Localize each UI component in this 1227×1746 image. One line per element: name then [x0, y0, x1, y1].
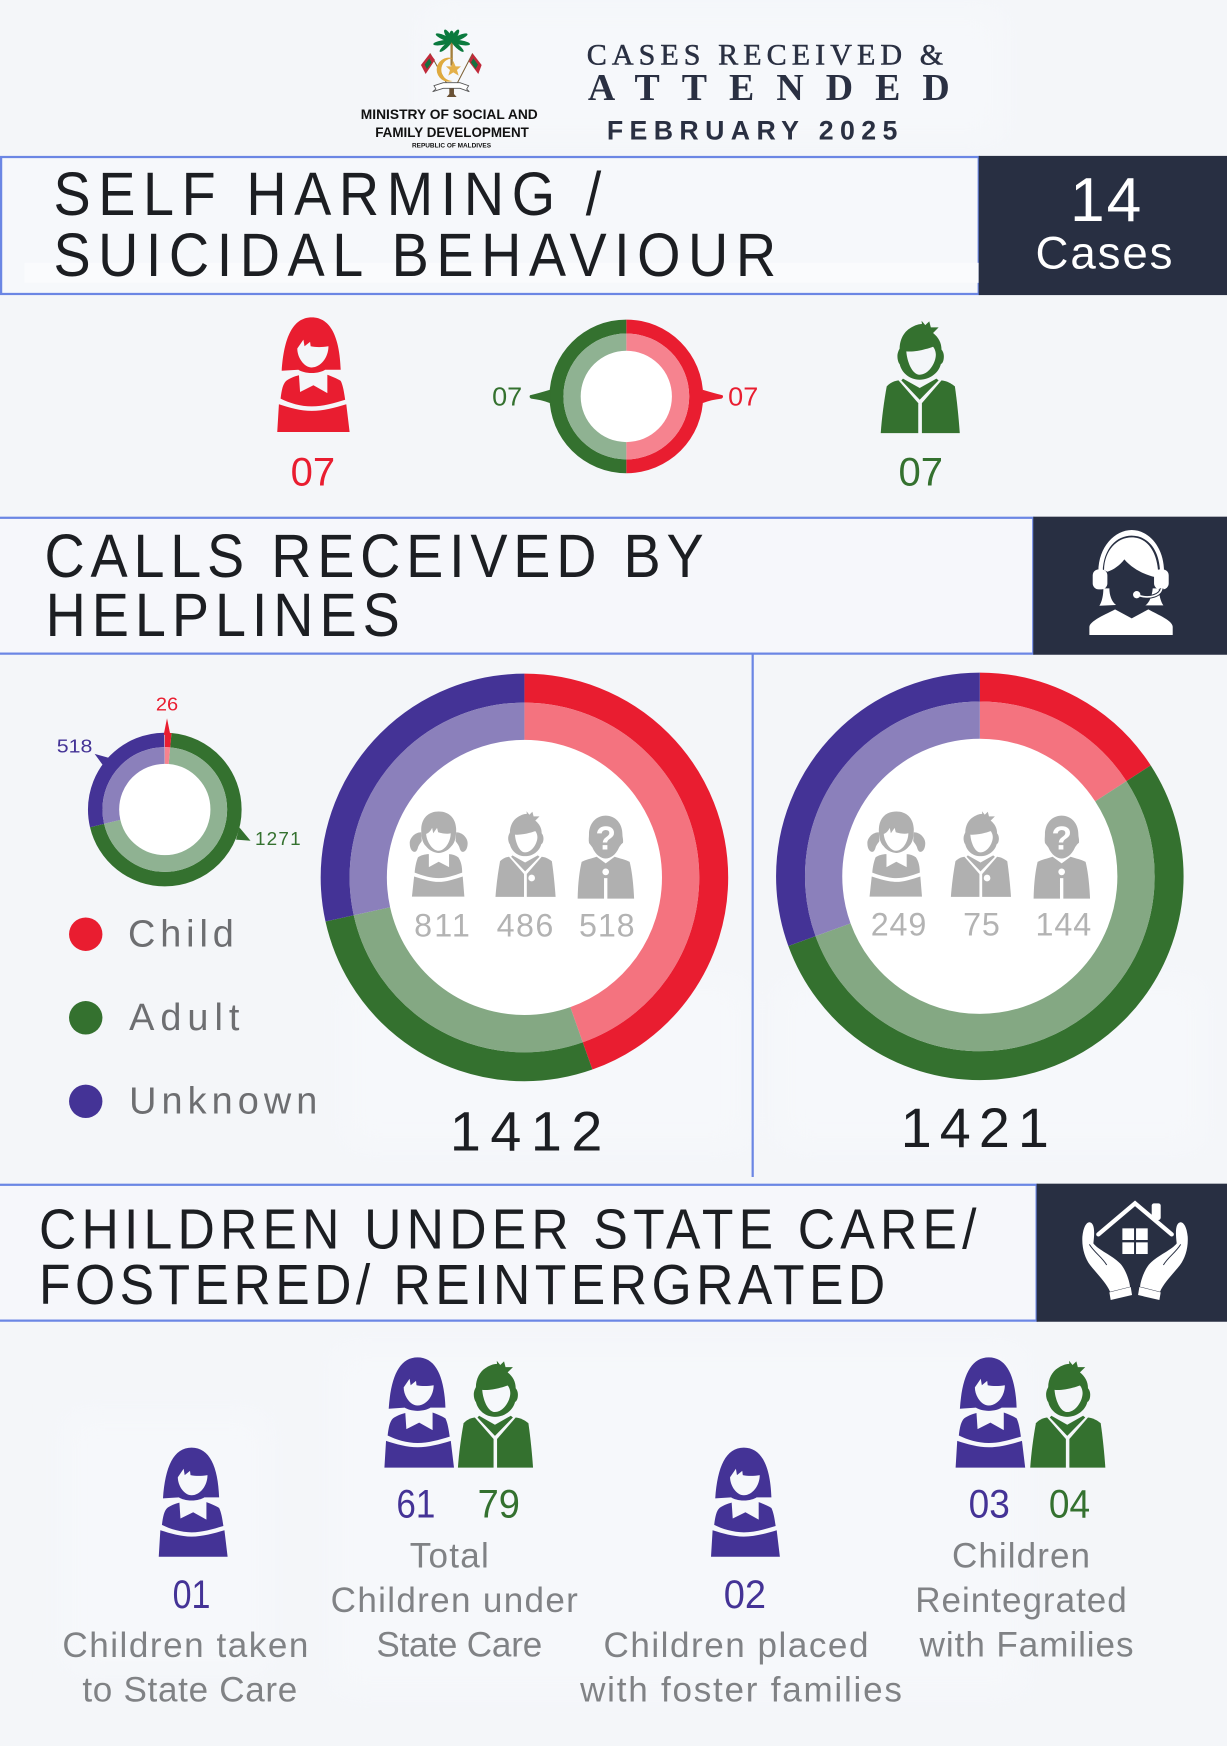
counts: 04 [1049, 1483, 1090, 1527]
icon: girl [159, 1448, 228, 1557]
icon: boy [1030, 1361, 1105, 1468]
legend item: adult: Adult [129, 997, 240, 1039]
heading [45, 522, 704, 649]
title: CASES RECEIVED & [587, 38, 943, 72]
icon: unknown person: ? [1051, 821, 1072, 858]
icon: house in hands [1082, 1203, 1188, 1300]
panel: children taken to state care [62, 1448, 308, 1709]
label: Total [410, 1536, 489, 1575]
heading: CHILDREN UNDER STATE CARE/ [39, 1197, 977, 1261]
male count: 07 [899, 450, 943, 494]
label [915, 1536, 1133, 1664]
counts: 03 [969, 1483, 1010, 1527]
count: 01 [173, 1573, 210, 1617]
case count [1035, 166, 1172, 278]
heading: SELF HARMING / [53, 161, 602, 229]
donut chart: gender [492, 320, 758, 473]
case count: Cases [1035, 227, 1172, 278]
icon: unknown person: ? [596, 821, 616, 858]
donut chart: gender: 07 [492, 383, 522, 411]
label [579, 1626, 902, 1709]
icon: unknown person [578, 816, 634, 899]
label: Reintegrated [915, 1581, 1127, 1620]
label: with Families [919, 1625, 1133, 1664]
chart: small overall donut: 518 [57, 737, 92, 758]
vertical divider [752, 654, 754, 1177]
count: 02 [724, 1573, 766, 1617]
female count: 07 [291, 450, 335, 494]
chart: right large donut 1421 [791, 687, 1169, 1159]
icon: ministry emblem [421, 28, 482, 97]
heading: HELPLINES [46, 581, 400, 649]
legend item: child: Child [128, 913, 234, 955]
heading [53, 161, 776, 290]
label: State Care [376, 1625, 542, 1664]
chart: left large donut 1412 [335, 688, 714, 1162]
counts: 79 [478, 1483, 520, 1527]
title [587, 38, 950, 146]
label: Children under [331, 1581, 578, 1620]
icon: boy [495, 811, 556, 897]
total: 1412 [450, 1100, 602, 1162]
heading: CALLS RECEIVED BY [45, 522, 704, 590]
title: FEBRUARY 2025 [607, 116, 898, 146]
group counts: 486 [497, 907, 553, 943]
panel: self harming gender split [277, 317, 960, 494]
legend item: adult [69, 997, 240, 1039]
counts [396, 1483, 520, 1527]
group counts: 811 [414, 907, 470, 943]
group counts [414, 907, 635, 943]
chart: small overall donut: 26 [156, 694, 178, 715]
donut chart: gender: 07 [728, 383, 758, 411]
label: Children taken [62, 1626, 308, 1665]
group counts: 75 [963, 906, 1000, 942]
icon: girl [384, 1357, 454, 1468]
case count: 14 [1070, 166, 1141, 235]
title: ATTENDED [588, 67, 950, 109]
ministry name: REPUBLIC OF MALDIVES [412, 143, 492, 150]
heading: SUICIDAL BEHAVIOUR [53, 222, 776, 290]
panel: children placed with foster families [579, 1448, 902, 1709]
label: with foster families [579, 1670, 902, 1709]
label [331, 1536, 578, 1664]
icon: boy [951, 811, 1011, 897]
total: 1421 [901, 1097, 1049, 1159]
group counts [871, 906, 1091, 942]
section banner: helplines [0, 517, 1227, 655]
counts [969, 1483, 1090, 1527]
legend item: unknown: Unknown [129, 1081, 317, 1123]
icon: male [881, 321, 960, 433]
icon: girl [956, 1357, 1025, 1468]
section banner: state care [0, 1184, 1227, 1322]
heading: FOSTERED/ REINTERGRATED [39, 1253, 885, 1316]
section banner: self harming [1, 156, 1227, 295]
group counts: 249 [871, 906, 926, 942]
ministry name [361, 107, 538, 150]
legend [69, 913, 317, 1123]
counts: 61 [396, 1483, 435, 1527]
header [361, 28, 950, 150]
label: Children [952, 1536, 1090, 1575]
legend item: child [69, 913, 234, 955]
ministry name: FAMILY DEVELOPMENT [375, 125, 530, 140]
ministry name: MINISTRY OF SOCIAL AND [361, 107, 538, 122]
label: Children placed [603, 1626, 868, 1665]
group counts: 518 [579, 907, 635, 943]
panel: total children under state care [331, 1357, 578, 1664]
heading [39, 1197, 977, 1316]
icon: headset operator [1089, 530, 1173, 635]
chart: small overall donut: 1271 [255, 829, 301, 850]
icon: girl [711, 1448, 780, 1557]
panel: children reintegrated with families [915, 1357, 1133, 1664]
icon: girl [410, 811, 468, 897]
group counts: 144 [1035, 906, 1091, 942]
chart: small overall donut [57, 694, 301, 879]
icon: unknown person [1034, 816, 1090, 899]
icon: girl [867, 811, 925, 897]
icon: female [277, 317, 350, 432]
label: to State Care [82, 1670, 297, 1709]
label [62, 1626, 308, 1709]
icon: boy [458, 1361, 533, 1468]
